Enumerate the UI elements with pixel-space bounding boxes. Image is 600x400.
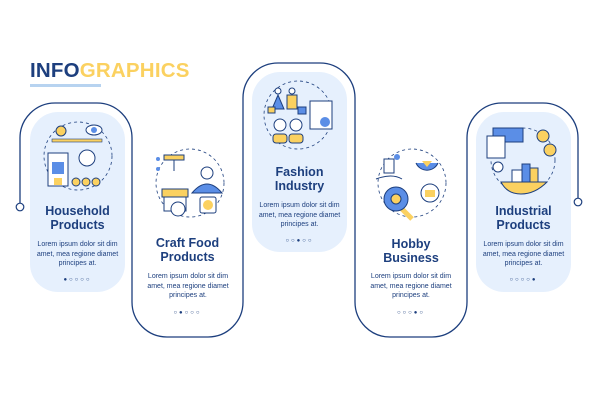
heading: industrial: Products xyxy=(496,218,551,232)
heading: industrial xyxy=(495,204,552,232)
heading: hobby xyxy=(383,237,439,265)
dots: ○○○●○ xyxy=(397,310,425,316)
icon: fashion xyxy=(264,80,332,150)
heading: fashion: Industry xyxy=(275,179,324,193)
icon: household xyxy=(44,122,112,190)
icon: hobby xyxy=(376,148,446,221)
dots: ○●○○○ xyxy=(173,310,202,316)
text: craft food: Lorem ipsum dolor sit dim amet, mea regione diamet principes at. xyxy=(147,273,229,299)
heading: household: Products xyxy=(50,218,105,232)
heading: craft food: Products xyxy=(160,250,215,264)
heading: industrial: Industrial xyxy=(495,204,552,218)
text: industrial: Lorem ipsum dolor sit dim amet, mea regione diamet principes at. xyxy=(483,241,564,267)
text: hobby: Lorem ipsum dolor sit dim amet, mea regione diamet principes at. xyxy=(370,273,452,299)
icon: industrial xyxy=(486,128,556,194)
heading: household: Household xyxy=(45,204,110,218)
text: household: Lorem ipsum dolor sit dim amet, mea regione diamet principes at. xyxy=(37,241,118,267)
heading: hobby: Business xyxy=(383,251,439,265)
icon: craft food xyxy=(156,148,224,218)
dots: ○○○○● xyxy=(509,277,538,283)
heading: household xyxy=(45,204,110,232)
heading: fashion: Fashion xyxy=(276,165,323,179)
underline xyxy=(30,84,101,87)
dots: ●○○○○ xyxy=(63,277,92,283)
heading: fashion xyxy=(275,165,324,193)
heading: craft food: Craft Food xyxy=(156,236,219,250)
heading: craft food xyxy=(156,236,219,264)
heading: hobby: Hobby xyxy=(392,237,430,251)
text: fashion: Lorem ipsum dolor sit dim amet, mea regione diamet principes at. xyxy=(259,202,340,228)
title: INFOGRAPHICS xyxy=(30,59,190,82)
dots: ○○●○○ xyxy=(285,238,314,244)
